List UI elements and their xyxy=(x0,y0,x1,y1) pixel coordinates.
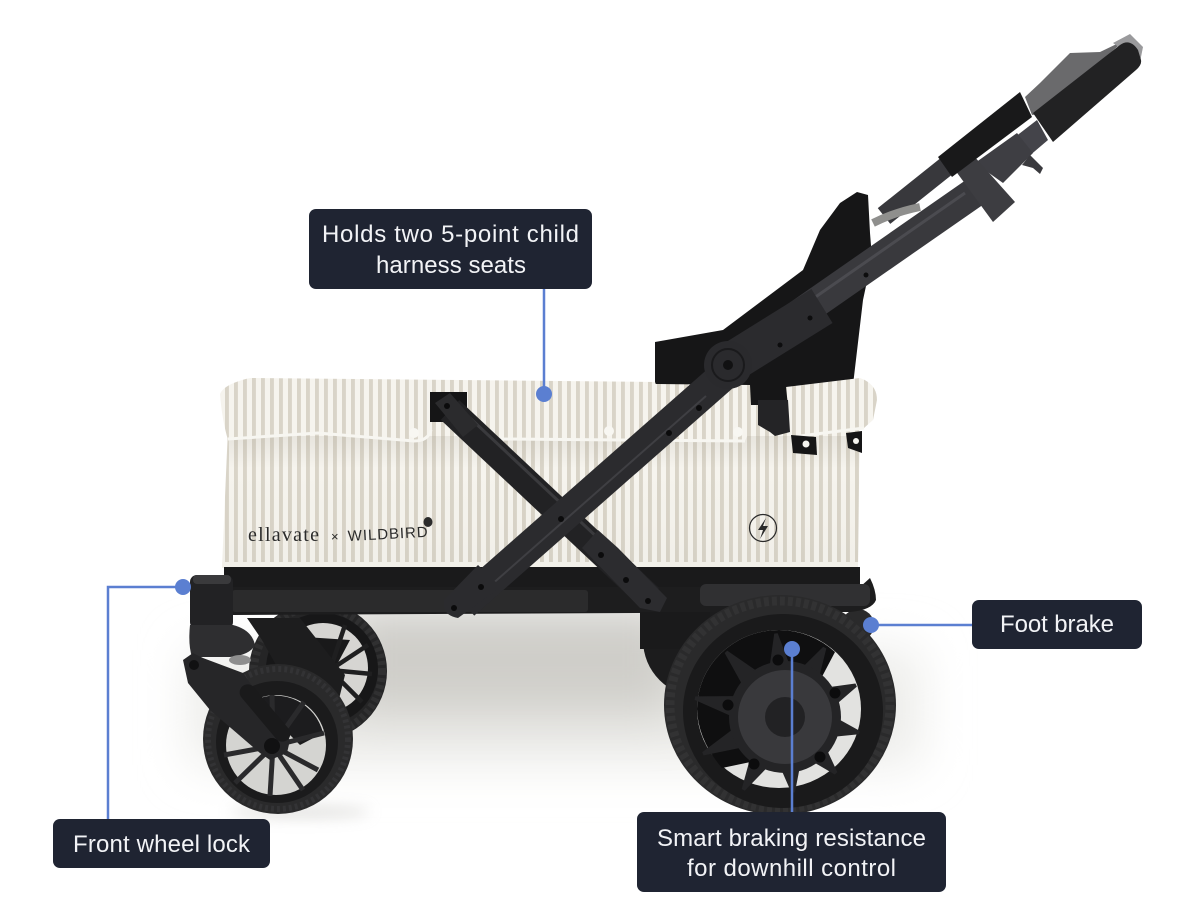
callout: seats xyxy=(309,209,592,402)
leader line: smart braking xyxy=(784,641,800,812)
callout: foot brake: Foot brake xyxy=(1000,611,1114,638)
clamp xyxy=(955,155,1015,222)
upper tube xyxy=(1015,120,1048,157)
grey lever xyxy=(1025,40,1125,115)
basket cuff xyxy=(220,378,877,455)
front swivel and fork xyxy=(183,625,294,760)
main tube xyxy=(745,192,975,352)
rear far wheel (left) xyxy=(247,602,387,740)
callout: seats: Holds two 5-point child xyxy=(322,221,579,248)
wagon basket body xyxy=(222,405,860,568)
callout: seats: harness seats xyxy=(376,252,526,279)
brand cross: × xyxy=(331,529,339,544)
callout: foot brake xyxy=(863,600,1142,649)
black straps xyxy=(430,392,467,422)
ground shadow xyxy=(190,605,920,818)
leader line: seats xyxy=(536,289,552,402)
front small wheel xyxy=(203,664,353,814)
hub xyxy=(738,670,832,764)
dark background behind the upper and left spokes xyxy=(697,630,835,768)
callout: smart braking xyxy=(637,641,946,892)
leader line: front wheel lock xyxy=(108,579,191,819)
front post xyxy=(190,575,233,629)
strap xyxy=(938,92,1032,177)
inner tube and cable xyxy=(884,165,948,216)
spokes xyxy=(692,632,862,796)
callout: front wheel lock: Front wheel lock xyxy=(73,831,251,858)
grip xyxy=(1033,42,1141,142)
pivot hub xyxy=(704,341,752,389)
callout: smart braking: Smart braking resistance xyxy=(657,825,926,852)
callout: smart braking: for downhill control xyxy=(687,855,896,882)
wildbird wordmark: WILDBIRD xyxy=(347,524,428,545)
rear far wheel (right) xyxy=(643,583,874,697)
brand text: ellavate xyxy=(248,524,319,546)
wagon base platform xyxy=(190,567,876,649)
leader line: foot brake xyxy=(863,617,972,633)
rear large wheel xyxy=(664,595,896,815)
icon: bird logo xyxy=(424,517,432,527)
seat back xyxy=(655,192,872,410)
end cap xyxy=(1113,34,1143,62)
handlebar xyxy=(732,34,1143,362)
icon: lightning badge xyxy=(750,514,776,542)
callout: front wheel lock xyxy=(53,579,270,868)
scissor frame xyxy=(435,341,752,618)
